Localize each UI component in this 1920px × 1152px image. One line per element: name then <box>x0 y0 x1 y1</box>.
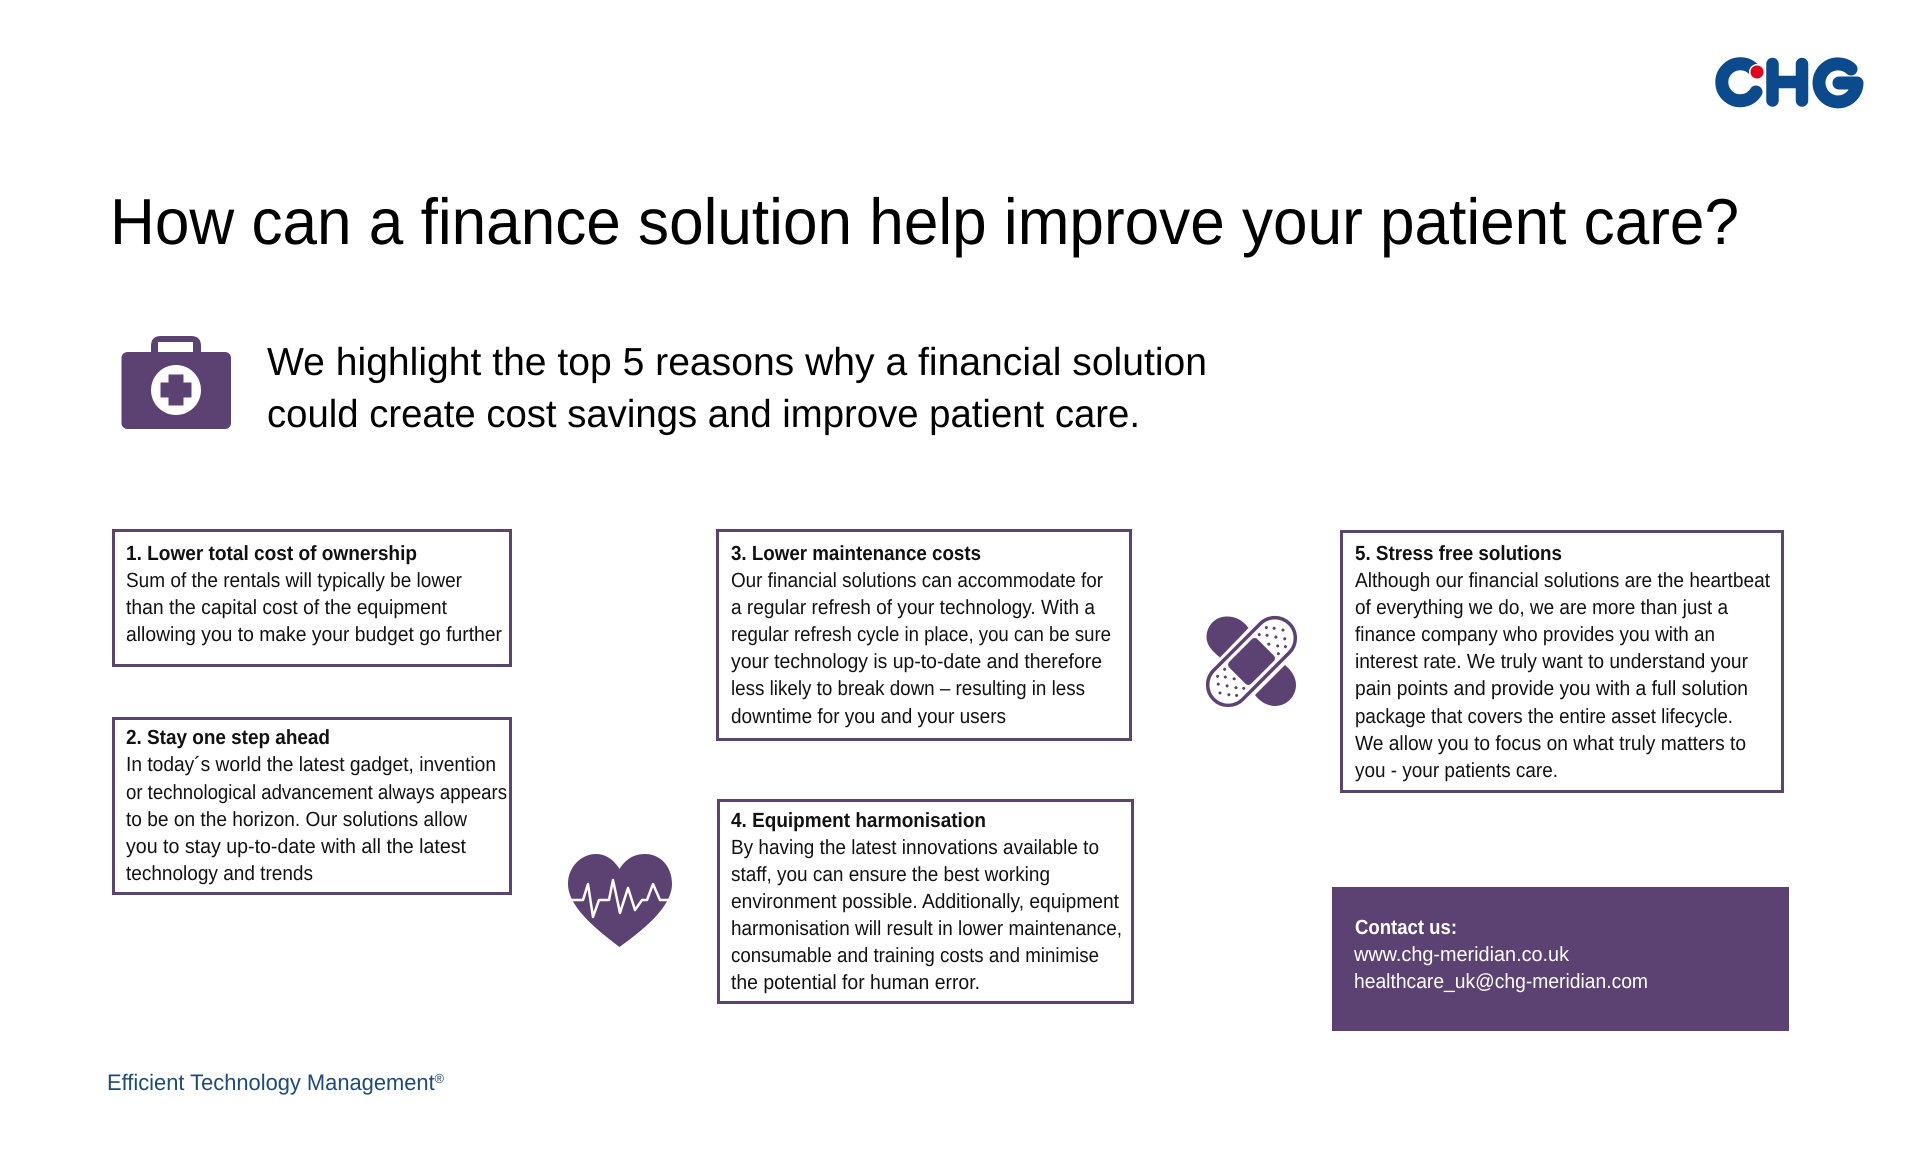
panel: reason 2 <box>114 718 510 894</box>
panel: reason 4: consumable and training costs and minimise <box>731 944 1099 967</box>
logo: CHG <box>1722 64 1857 102</box>
panel: reason 5 <box>1342 532 1782 792</box>
panel: reason 4 <box>718 800 1132 1002</box>
panel: reason 4: By having the latest innovations available to <box>731 836 1099 859</box>
intro text <box>267 341 1207 436</box>
panel: reason 2: you to stay up-to-date with all the latest <box>126 835 466 858</box>
panel: contact <box>1332 887 1789 1031</box>
panel: reason 3 <box>718 530 1130 740</box>
panel: reason 5: finance company who provides you with an <box>1355 623 1715 646</box>
panel: reason 4: environment possible. Additionally, equipment <box>731 890 1119 913</box>
panel: contact: Contact us: <box>1355 916 1457 939</box>
panel: reason 3: 3. Lower maintenance costs <box>731 542 981 565</box>
panel: reason 5: you - your patients care. <box>1355 759 1558 782</box>
panel: reason 3: downtime for you and your users <box>731 705 1006 728</box>
intro text: We highlight the top 5 reasons why a financial solution <box>267 341 1207 384</box>
panel: reason 4: the potential for human error. <box>731 971 980 994</box>
footer tagline: Efficient Technology Management <box>107 1070 444 1095</box>
title: How can a finance solution help improve your patient care? <box>110 185 1739 258</box>
panel: reason 2: or technological advancement always appears <box>126 781 507 804</box>
panel: reason 3: less likely to break down – resulting in less <box>731 677 1085 700</box>
icon: heart with pulse <box>568 854 672 947</box>
panel: reason 3: regular refresh cycle in place, you can be sure <box>731 623 1111 646</box>
panel: reason 3: your technology is up-to-date and therefore <box>731 650 1102 673</box>
panel: reason 4: harmonisation will result in lower maintenance, <box>731 917 1122 940</box>
panel: reason 5: 5. Stress free solutions <box>1355 542 1562 565</box>
panel: reason 2: 2. Stay one step ahead <box>126 726 330 749</box>
icon: bandage <box>1199 609 1304 714</box>
panel: reason 2: to be on the horizon. Our solutions allow <box>126 808 467 831</box>
panel: reason 4: staff, you can ensure the best working <box>731 863 1050 886</box>
panel: contact: www.chg-meridian.co.uk <box>1353 943 1570 966</box>
panel: reason 1 <box>114 530 510 666</box>
panel: reason 2: In today´s world the latest gadget, invention <box>126 753 496 776</box>
panel: reason 1: allowing you to make your budget go further <box>126 623 502 646</box>
panel: reason 5: pain points and provide you with a full solution <box>1355 677 1748 700</box>
panel: reason 5: of everything we do, we are more than just a <box>1355 596 1729 619</box>
icon: medical case <box>122 336 231 429</box>
panel: reason 1: Sum of the rentals will typically be lower <box>126 569 462 592</box>
panel: reason 1: than the capital cost of the equipment <box>126 596 447 619</box>
footer tagline: ® <box>435 1071 444 1086</box>
panel: reason 2: technology and trends <box>126 862 313 885</box>
panel: reason 5: Although our financial solutions are the heartbeat <box>1355 569 1770 592</box>
panel: reason 3: a regular refresh of your technology. With a <box>731 596 1096 619</box>
panel: reason 4: 4. Equipment harmonisation <box>731 809 986 832</box>
intro text: could create cost savings and improve patient care. <box>267 393 1140 436</box>
panel: reason 1: 1. Lower total cost of ownership <box>126 542 417 565</box>
panel: contact: healthcare_uk@chg-meridian.com <box>1354 970 1648 993</box>
panel: reason 5: interest rate. We truly want to understand your <box>1355 650 1748 673</box>
panel: reason 5: We allow you to focus on what truly matters to <box>1355 732 1746 755</box>
panel: reason 5: package that covers the entire asset lifecycle. <box>1355 705 1733 728</box>
panel: reason 3: Our financial solutions can accommodate for <box>731 569 1103 592</box>
